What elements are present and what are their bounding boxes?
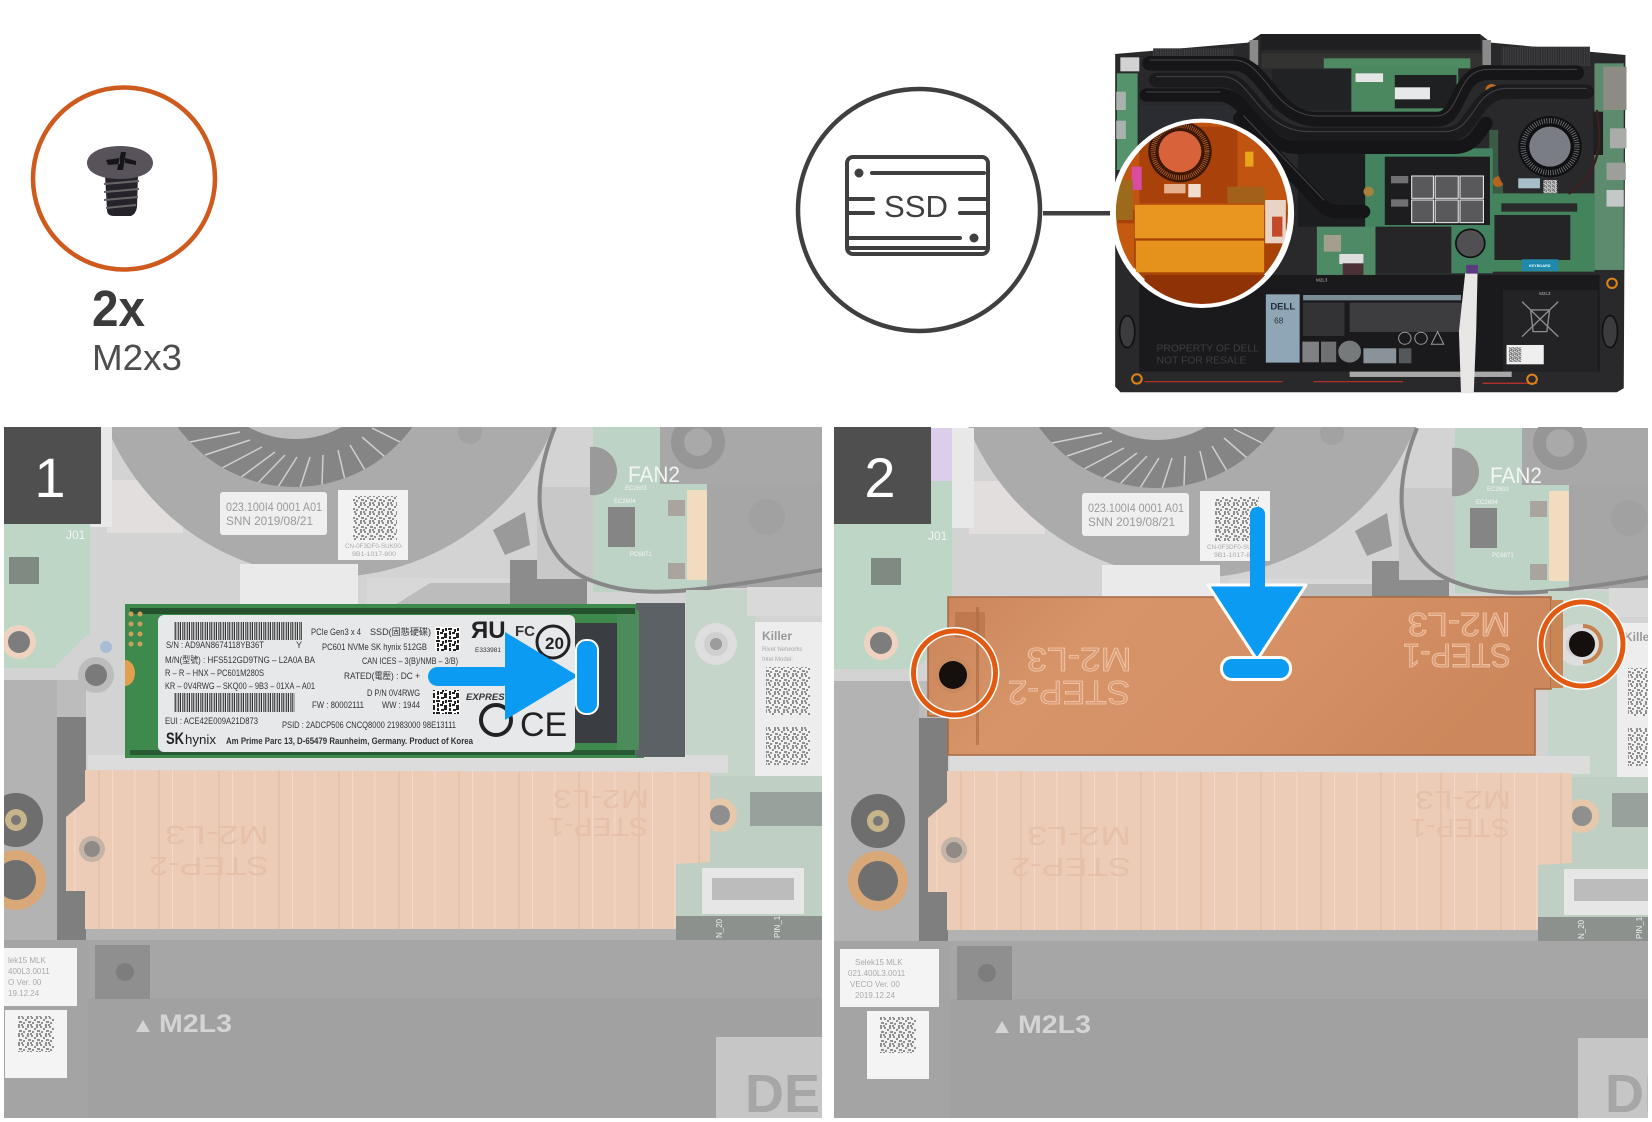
embossed text: STEP-2 xyxy=(1008,674,1130,711)
faded sticker text: J01 xyxy=(928,529,948,543)
black thermal stickers xyxy=(1375,157,1570,273)
screw ring right xyxy=(1541,602,1623,686)
SSD label sticker: FC xyxy=(515,623,535,640)
step number 1 xyxy=(4,427,101,524)
faded sticker text: M2L3 xyxy=(1018,1011,1091,1039)
faded sticker text: 021.400L3.0011 xyxy=(848,969,906,978)
faded sticker text xyxy=(8,462,886,1122)
SSD label sticker: PSID : 2ADCP506 CNCQ8000 21983000 98E13111 xyxy=(282,720,456,730)
faded sticker text: M2-L3 xyxy=(1027,821,1131,851)
faded sticker text: STEP-1 xyxy=(1410,813,1510,843)
icon: SSD xyxy=(847,157,988,254)
battery: M2L3 xyxy=(1316,278,1328,283)
SSD label sticker: ЯU xyxy=(471,617,506,644)
faded sticker text: 023.100I4 0001 A01 xyxy=(1088,503,1184,515)
SSD label sticker: Y xyxy=(296,640,302,650)
SSD label sticker: KR – 0V4RWG – SKQ00 – 9B3 – 01XA – A01 xyxy=(165,681,315,691)
faded sticker text: M2L3 xyxy=(159,1010,232,1038)
speakers and bottom trim xyxy=(1120,279,1618,384)
faded sticker text: SNN 2019/08/21 xyxy=(226,516,313,528)
SSD label: SSD xyxy=(884,189,948,224)
copper shield plate xyxy=(928,597,1563,755)
SSD label sticker: PC601 NVMe SK hynix 512GB xyxy=(322,642,427,652)
battery: NOT FOR RESALE xyxy=(1157,355,1247,366)
panel: step 2 xyxy=(834,427,1648,1118)
faded sticker text: N_20 xyxy=(1577,919,1586,939)
faded sticker text: Rivet Networks xyxy=(762,647,802,653)
faded sticker text: EC2604 xyxy=(1476,500,1498,506)
battery xyxy=(1139,275,1600,372)
faded sticker text: 9B1-1017-800 xyxy=(1214,553,1259,559)
arrow: slide SSD into connector xyxy=(428,632,598,720)
faded sticker text: Selek15 MLK xyxy=(855,958,903,967)
panel: step 1 xyxy=(4,427,822,1118)
faded sticker text: PC6871 xyxy=(630,552,652,558)
SSD label sticker: WW : 1944 xyxy=(382,700,420,710)
faded sticker text: J01 xyxy=(66,528,86,542)
step number 2 xyxy=(834,427,931,524)
faded sticker text: O Ver. 00 xyxy=(8,978,42,987)
SSD label sticker: D P/N 0V4RWG xyxy=(367,688,420,698)
battery: PROPERTY OF DELL xyxy=(1157,344,1259,355)
orange circle around screw xyxy=(33,88,215,270)
SSD label sticker: hynix xyxy=(185,732,216,747)
SSD label sticker xyxy=(158,615,575,752)
SSD label sticker: CAN ICES – 3(B)/NMB – 3/B) xyxy=(362,656,458,666)
faded sticker text: 2019.12.24 xyxy=(855,991,896,1000)
faded sticker text: FAN2 xyxy=(1490,463,1542,488)
SSD label sticker: Am Prime Parc 13, D-65479 Raunheim, Germany. Product of Korea xyxy=(226,736,474,746)
battery: M2L3 xyxy=(1539,291,1551,296)
faded sticker text: EC2604 xyxy=(614,499,636,505)
faded laptop background xyxy=(4,427,822,1118)
SSD label sticker: E333981 xyxy=(475,647,501,654)
faded sticker text: M2-L3 xyxy=(553,784,649,814)
SSD label sticker: 20 xyxy=(545,634,564,653)
faded sticker text: 023.100I4 0001 A01 xyxy=(226,502,322,514)
SSD label sticker: SK xyxy=(166,729,185,748)
SSD label sticker: RATED(電壓) : DC + xyxy=(344,671,420,681)
faded sticker text: Killer xyxy=(762,629,792,643)
SSD label sticker: FW : 80002111 xyxy=(312,700,364,710)
keyboard connector xyxy=(1522,259,1558,271)
ribbon cable xyxy=(1459,265,1478,393)
SSD label sticker: R – R – HNX – PC601M280S xyxy=(165,668,264,678)
step number 2: 2 xyxy=(864,446,896,509)
screw callout xyxy=(33,88,215,378)
faded sticker text: STEP-1 xyxy=(548,812,648,842)
right fan xyxy=(1498,103,1599,194)
coin battery xyxy=(1456,229,1485,257)
faded sticker text xyxy=(848,463,1652,1122)
faded sticker text: SNN 2019/08/21 xyxy=(1088,517,1175,529)
faded sticker text: EC2603 xyxy=(625,486,647,492)
screw type: M2x3 xyxy=(92,337,182,378)
faded sticker text: N_20 xyxy=(715,918,724,938)
screw count: 2x xyxy=(92,280,145,337)
faded sticker text: 9B1-1017-800 xyxy=(352,552,397,558)
faded sticker text: M2-L3 xyxy=(165,820,269,850)
battery: DELL xyxy=(1270,301,1296,311)
SSD module xyxy=(125,603,685,758)
connector line xyxy=(1043,211,1111,216)
faded sticker text: PIN_1 xyxy=(773,915,782,938)
SSD label sticker: M/N(型號) : HFS512GD9TNG – L2A0A BA xyxy=(165,654,315,665)
faded sticker text: lek15 MLK xyxy=(8,956,46,965)
battery: 68 xyxy=(1274,316,1284,325)
faded sticker text: VECO Ver. 00 xyxy=(850,980,900,989)
SSD label sticker: EUI : ACE42E009A21D873 xyxy=(165,716,258,726)
faded sticker text: STEP-2 xyxy=(1011,852,1131,882)
faded sticker text: STEP-2 xyxy=(149,851,269,881)
step number 1: 1 xyxy=(34,446,66,509)
screw ring left xyxy=(914,631,996,715)
faded sticker text: EC2603 xyxy=(1487,487,1509,493)
SSD location callout circle xyxy=(798,89,1040,331)
keyboard connector: KEYBOARD xyxy=(1529,264,1551,268)
icon: screw xyxy=(87,146,153,216)
faded laptop background xyxy=(834,427,1648,1118)
embossed text: M2-L3 xyxy=(1026,641,1132,678)
arrow: lower shield xyxy=(1208,507,1306,681)
faded sticker text: FAN2 xyxy=(628,462,680,487)
faded sticker text: PIN_1 xyxy=(1635,916,1644,939)
SSD label sticker: SSD(固態硬碟) xyxy=(370,626,431,637)
heat pipes xyxy=(1147,60,1587,212)
faded sticker text: CN-0F3DF0-SUK00- xyxy=(345,544,403,550)
SSD label sticker: CE xyxy=(520,706,567,744)
faded sticker text: Intel Model: xyxy=(762,657,793,663)
embossed text: M2-L3 xyxy=(1408,606,1510,643)
embossed text: STEP-1 xyxy=(1403,637,1511,674)
highlighted SSD area xyxy=(1110,120,1293,305)
embossed text xyxy=(1008,606,1511,711)
faded sticker text: 19.12.24 xyxy=(8,989,40,998)
faded sticker text: PC6871 xyxy=(1492,553,1514,559)
laptop interior overview xyxy=(1110,34,1627,393)
faded sticker text: 400L3.0011 xyxy=(8,967,50,976)
SSD label sticker: EXPRES xyxy=(466,692,505,703)
faded sticker text: M2-L3 xyxy=(1415,785,1511,815)
SSD label sticker: PCIe Gen3 x 4 xyxy=(311,627,361,637)
faded sticker text: CN-0F3DF0-SUK00- xyxy=(1207,545,1265,551)
SSD label sticker: S/N : AD9AN8674118YB36T xyxy=(166,640,264,650)
